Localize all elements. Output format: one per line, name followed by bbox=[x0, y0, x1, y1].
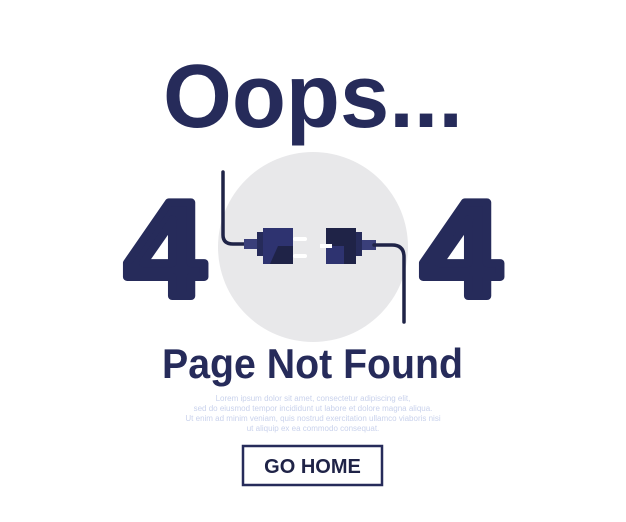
background circle bbox=[218, 152, 408, 342]
body text bbox=[185, 394, 441, 433]
body text: sed do eiusmod tempor incididunt ut labore et dolore magna aliqua. bbox=[194, 404, 432, 413]
subtitle: Page Not Found bbox=[162, 340, 463, 387]
right digit 4: 4 bbox=[421, 173, 501, 325]
icon: right plug bbox=[320, 228, 404, 322]
button: go home bbox=[243, 446, 382, 485]
body text: Lorem ipsum dolor sit amet, consectetur adipiscing elit, bbox=[216, 394, 410, 403]
body text: ut aliquip ex ea commodo consequat. bbox=[247, 424, 379, 433]
left digit 4: 4 bbox=[125, 173, 205, 325]
title: Oops... bbox=[163, 47, 463, 147]
icon: left plug bbox=[223, 172, 307, 264]
body text: Ut enim ad minim veniam, quis nostrud exercitation ullamco viaboris nisi bbox=[185, 414, 441, 423]
button: go home: GO HOME bbox=[264, 456, 361, 478]
